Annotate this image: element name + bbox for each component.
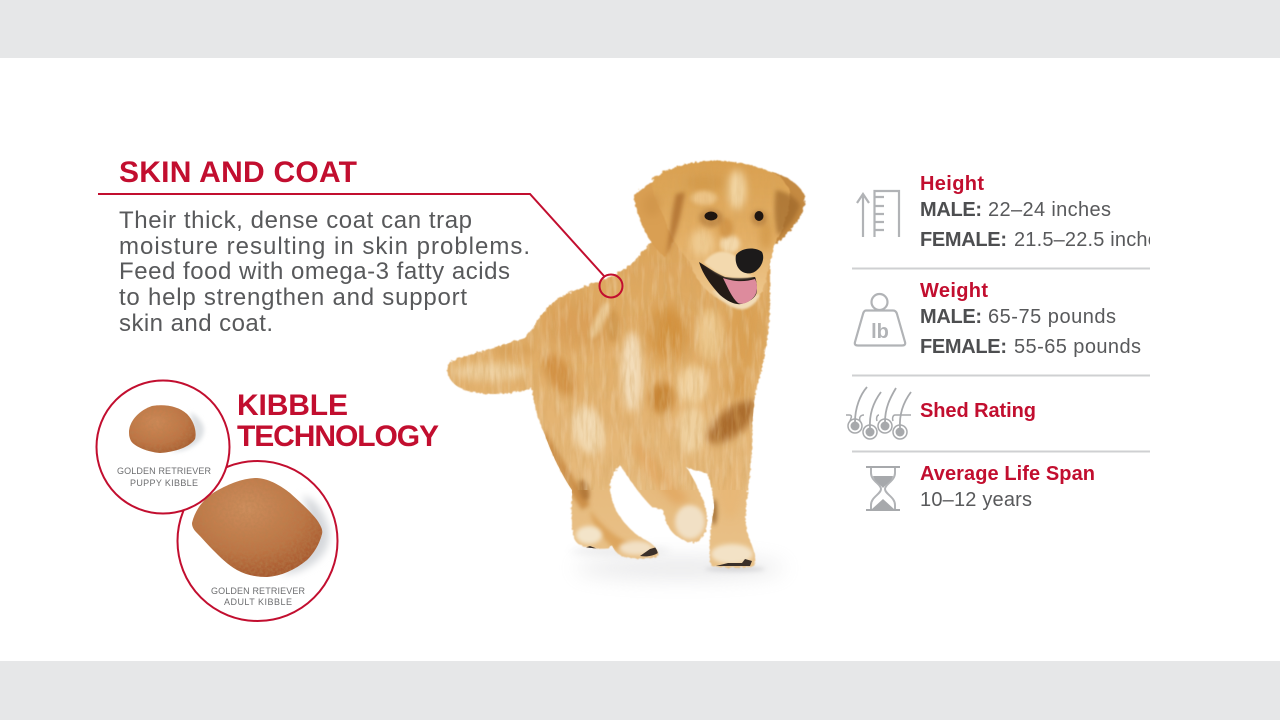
dog face shading xyxy=(652,166,774,260)
adult kibble label xyxy=(211,586,306,607)
male weight: 65-75 pounds xyxy=(988,306,1116,328)
panel: shed rating xyxy=(846,387,1036,439)
male height: MALE: xyxy=(920,199,982,221)
dog body xyxy=(447,220,770,568)
heading: kibble technology xyxy=(237,389,439,453)
dog fur texture xyxy=(445,240,775,490)
illustration: golden retriever xyxy=(445,160,805,579)
dog skull xyxy=(652,161,790,306)
puppy kibble label: GOLDEN RETRIEVER xyxy=(117,466,212,476)
female height: FEMALE: xyxy=(920,229,1007,251)
icon: puppy kibble shadow xyxy=(170,412,204,452)
female weight: 55-65 pounds xyxy=(1014,336,1141,358)
top grey band xyxy=(0,0,1280,58)
panel: puppy kibble xyxy=(96,380,230,514)
adult kibble label: ADULT KIBBLE xyxy=(224,597,292,607)
male height xyxy=(920,199,1111,221)
panel: weight xyxy=(855,280,1141,358)
female height: 21.5–22.5 inches xyxy=(1014,229,1169,251)
height heading: Height xyxy=(920,173,984,195)
dog left ear shading xyxy=(666,192,685,256)
adult kibble label: GOLDEN RETRIEVER xyxy=(211,586,306,596)
dog muzzle xyxy=(704,252,755,278)
heading: kibble technology: KIBBLE xyxy=(237,389,348,422)
bottom grey band xyxy=(0,661,1280,720)
text block: skin and coat description xyxy=(119,207,530,337)
panel: adult kibble xyxy=(178,461,338,621)
dog nose xyxy=(736,249,763,273)
weight heading: Weight xyxy=(920,280,988,302)
panel: height xyxy=(856,175,1150,246)
text block: skin and coat description: Their thick, dense coat can trap xyxy=(119,207,472,234)
icon: weight xyxy=(855,294,905,346)
dog tongue xyxy=(723,278,757,304)
text block: skin and coat description: moisture resulting in skin problems. xyxy=(119,233,530,260)
text block: skin and coat description: to help strengthen and support xyxy=(119,284,467,311)
callout leader line and marker xyxy=(98,194,622,298)
female weight: FEMALE: xyxy=(920,336,1007,358)
dog eyes xyxy=(704,211,764,221)
male weight xyxy=(920,306,1116,328)
panel: average life span xyxy=(866,463,1095,511)
icon: puppy kibble xyxy=(129,405,196,453)
male weight: MALE: xyxy=(920,306,982,328)
dog ground shadow xyxy=(570,547,785,579)
dog head xyxy=(634,160,805,309)
female weight xyxy=(920,336,1141,358)
puppy kibble label: PUPPY KIBBLE xyxy=(130,478,198,488)
dog claws xyxy=(584,546,752,566)
heading: skin and coat: SKIN AND COAT xyxy=(119,156,357,189)
female height xyxy=(921,231,1150,246)
shed rating heading: Shed Rating xyxy=(920,400,1036,422)
icon: adult kibble xyxy=(192,478,322,577)
dog chin xyxy=(712,290,760,309)
text block: skin and coat description: skin and coat. xyxy=(119,310,273,337)
icon: adult kibble shadow xyxy=(280,495,329,575)
text block: skin and coat description: Feed food with omega-3 fatty acids xyxy=(119,258,510,285)
icon: weight: lb xyxy=(871,321,889,343)
icon: hourglass xyxy=(866,467,900,510)
dog left ear xyxy=(634,178,684,257)
dog right ear xyxy=(770,172,805,245)
dog body shading xyxy=(445,240,775,566)
male height: 22–24 inches xyxy=(988,199,1111,221)
dog right ear shading xyxy=(775,190,800,236)
heading: kibble technology: TECHNOLOGY xyxy=(237,420,439,453)
life span value: 10–12 years xyxy=(920,489,1032,511)
icon: height ruler xyxy=(857,191,899,237)
dog mouth xyxy=(699,262,757,304)
puppy kibble label xyxy=(117,466,212,488)
icon: hair follicles xyxy=(846,387,911,439)
life span heading: Average Life Span xyxy=(920,463,1095,485)
